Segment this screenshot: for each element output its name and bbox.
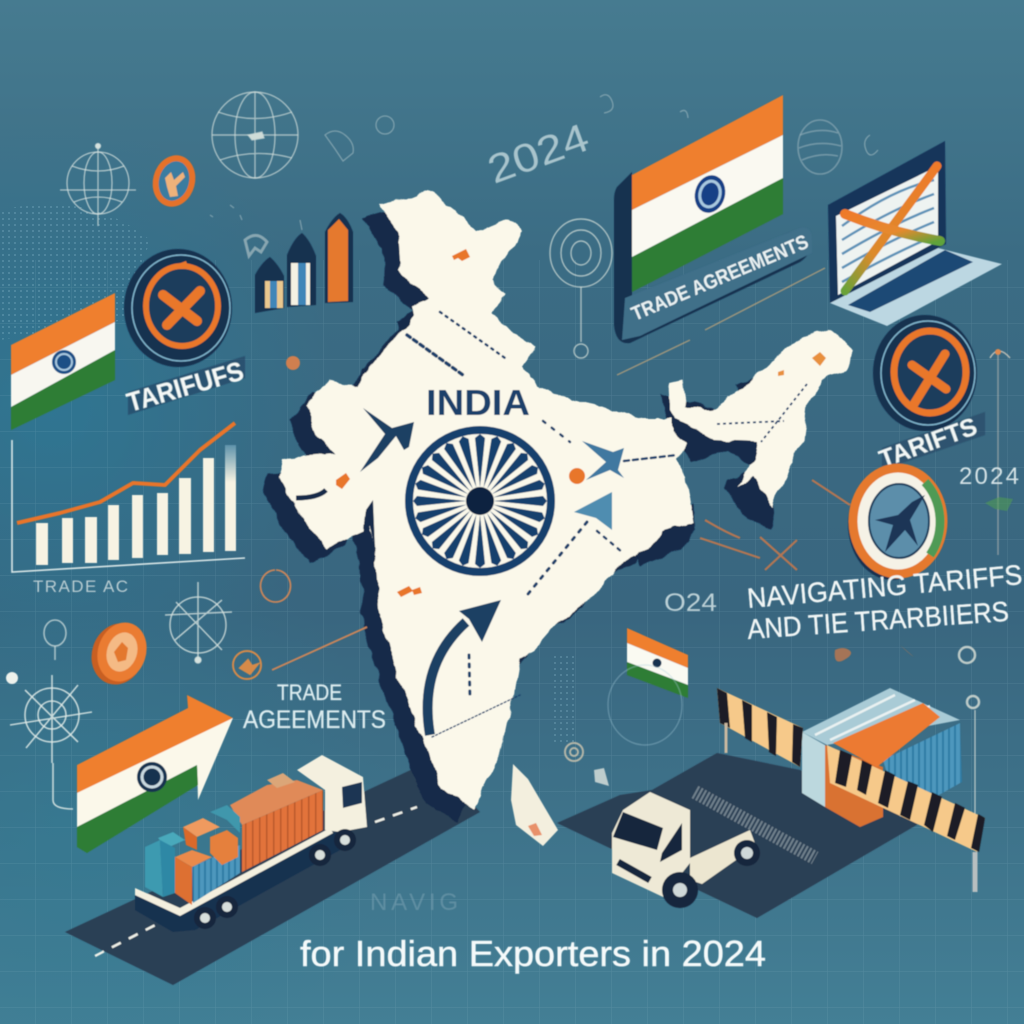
flag: left waving (11, 293, 115, 430)
platform (557, 753, 920, 918)
label: tarifufs: TARIFUFS (123, 356, 247, 418)
map: orange marks (336, 249, 585, 597)
icon: small orange ring (233, 651, 261, 679)
label: trade agreements lower: AGEEMENTS (243, 706, 386, 734)
icon: faint map circle (608, 665, 682, 745)
icon: small coin spiral (565, 743, 583, 761)
orange smudges (835, 645, 914, 662)
connector line (617, 268, 825, 375)
label: 2024 small: 2024 (959, 463, 1019, 490)
icon: pin right (990, 349, 1010, 555)
container (802, 688, 962, 827)
line and bar chart: TRADE AC (33, 577, 128, 596)
label: trade agreements on banner: TRADE AGREEMENTS (628, 231, 812, 326)
icon: faint scribble cluster top (210, 95, 878, 230)
arrow: curved (428, 600, 501, 735)
icon: 024 label: O24 (664, 589, 717, 617)
tyre mark pattern (695, 792, 815, 858)
truck left (135, 755, 367, 932)
icon: swirl near chart (245, 235, 267, 256)
mini bar chart (255, 213, 353, 313)
chakra wheel (409, 430, 551, 572)
orange connector (261, 570, 367, 670)
label: INDIA: INDIA (426, 382, 530, 423)
title: navigating (746, 559, 1023, 645)
label: trade agreements lower: TRADE (277, 680, 342, 705)
icon: pin circle (44, 620, 66, 660)
map: India mainland (279, 190, 694, 809)
line and bar chart (12, 423, 245, 596)
dot (6, 672, 18, 684)
flag: right large (632, 95, 783, 292)
label: trade agreements lower (243, 680, 386, 734)
flag: arrow shaped (77, 695, 233, 853)
icon: orange coin (84, 616, 154, 692)
orange cross sketch (700, 480, 850, 570)
faint ghost label: NAVIG (370, 889, 458, 916)
orange dot (286, 356, 300, 370)
icon: lower globe (165, 582, 232, 663)
icon: small wire globe (60, 144, 136, 226)
flag: small (627, 628, 688, 698)
icon: blue triangle plane (574, 492, 612, 530)
icon: stripe ball top right (798, 120, 842, 174)
icon: spiral target (550, 219, 612, 358)
icon: tariff cross badge right (873, 315, 977, 431)
icon: green leaf (985, 497, 1013, 511)
map: India shadow (263, 204, 780, 823)
label: tarifts: TARIFTS (875, 412, 981, 474)
icon: tariff cross badge left (124, 249, 232, 367)
truck right (612, 792, 760, 908)
icon: large wire globe (212, 92, 298, 178)
icon: 2024 top: 2024 (482, 116, 595, 192)
map: dotted borders (407, 312, 677, 737)
title: for Indian exporters: for Indian Exporters in 2024 (300, 933, 766, 974)
icon: plane east (582, 441, 624, 480)
icon: orange badge (147, 150, 201, 212)
icon: small white tag (594, 768, 609, 786)
road left (65, 767, 480, 985)
barrier (717, 688, 985, 892)
icon: wheel left (10, 675, 92, 809)
icon: right small pins (959, 647, 979, 850)
icon: laptop (828, 141, 1002, 326)
map: northeast (670, 329, 855, 506)
panel: right flag backing (614, 172, 812, 343)
icon: plane west (360, 408, 414, 472)
map: southern island (511, 764, 558, 846)
icon: plane badge (848, 468, 943, 580)
